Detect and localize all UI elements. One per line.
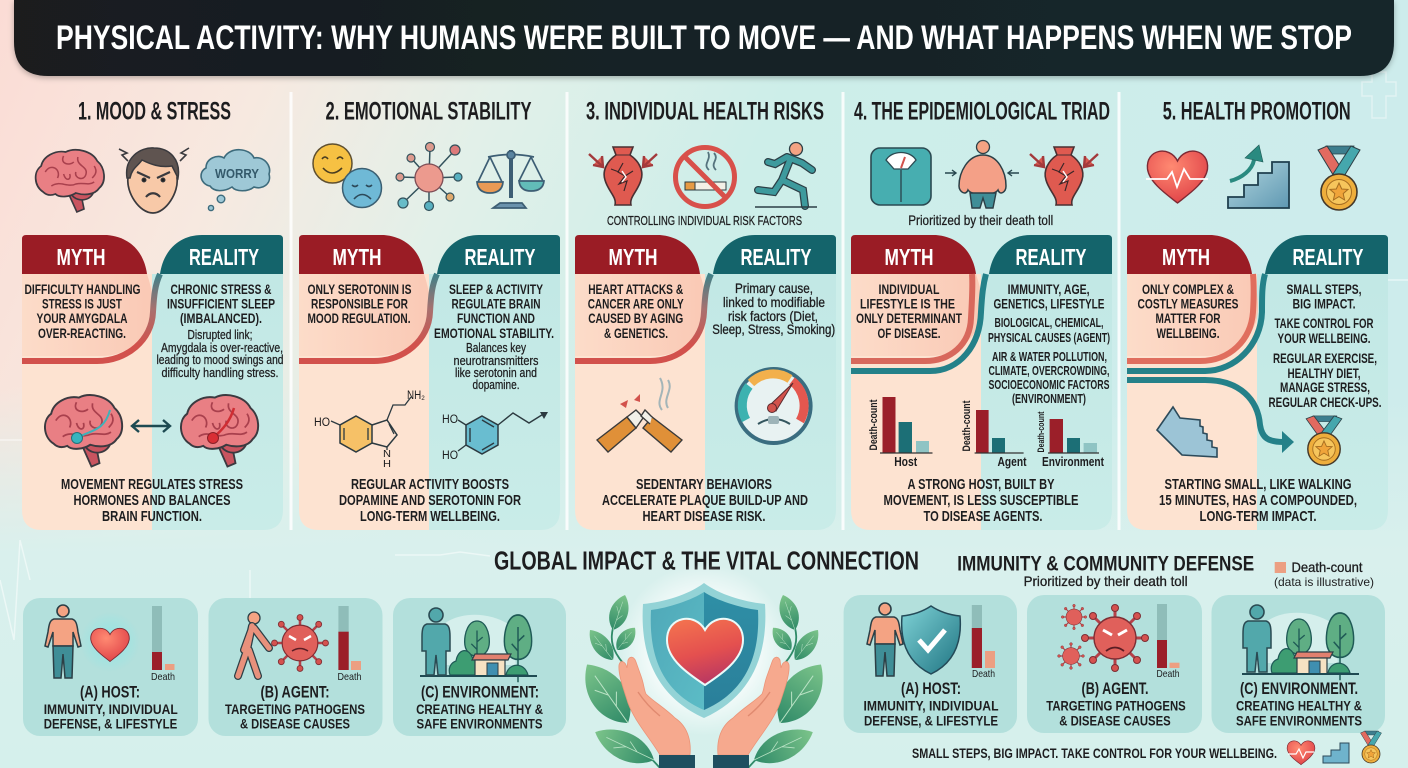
icon: medal reward: [1306, 416, 1342, 465]
reality text: [988, 281, 1110, 406]
takeaway text: [339, 476, 521, 525]
reality text: CLIMATE, OVERCROWDING,: [988, 364, 1110, 378]
card text: DEFENSE, & LIFESTYLE: [864, 713, 998, 729]
card text: DEFENSE, & LIFESTYLE: [44, 716, 177, 732]
icon: running figure: [755, 142, 817, 207]
takeaway text: [884, 476, 1078, 525]
title bar: [14, 0, 1394, 76]
icon: balance scale: [477, 150, 544, 208]
bar chart: agent: Agent: [998, 455, 1027, 469]
takeaway text: [1159, 476, 1357, 525]
heading 1: 1. MOOD & STRESS: [78, 98, 231, 126]
icon: walking person: [238, 612, 269, 676]
reality label: REALITY: [1016, 244, 1086, 270]
myth text: ONLY COMPLEX &: [1142, 281, 1234, 297]
card text: & DISEASE CAUSES: [1059, 713, 1171, 729]
myth text: CANCER ARE ONLY: [588, 296, 684, 312]
icon: person and neighbourhood: [420, 608, 537, 682]
heading: global impact: GLOBAL IMPACT & THE VITAL CONNECTION: [494, 546, 919, 576]
takeaway text: LONG-TERM IMPACT.: [1200, 508, 1316, 525]
reality text: PHYSICAL CAUSES (AGENT): [988, 331, 1110, 345]
card text: [1046, 680, 1186, 729]
myth text: [856, 281, 962, 341]
death bar: Death: [972, 668, 995, 680]
reality text: (IMBALANCED).: [180, 310, 262, 326]
myth label: MYTH: [1162, 244, 1210, 270]
myth text: MOOD REGULATION.: [308, 310, 410, 326]
heading 3: 3. INDIVIDUAL HEALTH RISKS: [586, 98, 824, 126]
icon: person: [867, 603, 903, 676]
reality text: like serotonin and: [455, 366, 537, 380]
card: left environment: [393, 598, 566, 736]
card text: (C) ENVIRONMENT:: [421, 684, 539, 702]
icon: serotonin molecule: NH₂: [407, 390, 425, 402]
reality text: CHRONIC STRESS &: [170, 281, 272, 297]
card text: CREATING HEALTHY &: [416, 701, 543, 717]
reality label: REALITY: [740, 244, 812, 270]
myth text: WELLBEING.: [1156, 325, 1220, 341]
reality text: INSUFFICIENT SLEEP: [167, 296, 275, 312]
reality text: AIR & WATER POLLUTION,: [992, 350, 1107, 364]
column dividers: [291, 92, 1119, 530]
icon: serotonin molecule: H: [383, 458, 391, 470]
reality text: Sleep, Stress, Smoking): [712, 321, 835, 337]
reality label: REALITY: [189, 244, 259, 270]
left hand and leaves: [572, 592, 695, 768]
reality text: SMALL STEPS,: [1286, 281, 1362, 297]
death bar: Death: [1156, 668, 1180, 680]
icon: heart with glow: [80, 612, 140, 672]
icon: walking shoe: [1157, 407, 1217, 457]
reality text: [156, 281, 284, 380]
reality text: dopamine.: [472, 378, 520, 392]
takeaway text: ACCELERATE PLAQUE BUILD-UP AND: [602, 492, 808, 509]
heading 2: 2. EMOTIONAL STABILITY: [326, 98, 532, 126]
panel 4: the epidemiological triad: [851, 98, 1112, 530]
takeaway text: MOVEMENT, IS LESS SUSCEPTIBLE: [884, 492, 1078, 509]
myth and reality card: [575, 235, 836, 530]
myth text: & GENETICS.: [604, 325, 668, 341]
myth label: MYTH: [332, 244, 382, 270]
takeaway text: [61, 476, 243, 525]
card: left host: [23, 598, 198, 736]
reality text: Disrupted link;: [188, 328, 252, 342]
closing strap line: SMALL STEPS, BIG IMPACT. TAKE CONTROL FOR YOUR WELLBEING.: [912, 745, 1277, 761]
card text: IMMUNITY, INDIVIDUAL: [864, 698, 999, 714]
myth text: DIFFICULTY HANDLING: [24, 281, 141, 297]
card text: [225, 684, 365, 732]
icon: dopamine molecule: [442, 412, 548, 462]
death bar: Death: [151, 671, 175, 683]
takeaway text: STARTING SMALL, LIKE WALKING: [1164, 476, 1352, 493]
controlling risk factors caption: CONTROLLING INDIVIDUAL RISK FACTORS: [607, 214, 802, 228]
icon: weighing scale: [871, 148, 931, 205]
reality text: [1268, 281, 1382, 410]
reality text: neurotransmitters: [454, 354, 538, 368]
panel 2: emotional stability: [299, 98, 560, 530]
icon: cracked heart vase with arrows: [589, 147, 657, 205]
bar chart: environment: Death-count: [1036, 412, 1046, 452]
icon: brain: [36, 150, 104, 212]
icon: no smoking sign: [676, 148, 734, 206]
myth text: [24, 281, 141, 341]
myth text: ONLY DETERMINANT: [856, 310, 962, 326]
myth text: STRESS IS JUST: [42, 296, 122, 312]
card text: TARGETING PATHOGENS: [225, 701, 365, 717]
icon: shield with check: [902, 606, 960, 674]
icon: worry thought cloud: WORRY: [215, 166, 259, 181]
bar chart: agent: Death-count: [961, 400, 973, 452]
card: right host: [844, 595, 1017, 733]
reality text: REGULATE BRAIN: [452, 296, 540, 312]
card: left agent: [208, 598, 382, 736]
myth label: MYTH: [56, 244, 106, 270]
card text: (C) ENVIRONMENT.: [1240, 680, 1358, 698]
takeaway text: DOPAMINE AND SEROTONIN FOR: [339, 492, 521, 509]
card text: [44, 684, 178, 732]
takeaway text: LONG-TERM WELLBEING.: [360, 508, 500, 525]
reality text: BIG IMPACT.: [1292, 296, 1356, 312]
myth text: [588, 281, 684, 341]
icon: person and neighbourhood: [1242, 605, 1359, 680]
icon: risk gauge: [737, 369, 811, 443]
reality text: risk factors (Diet,: [728, 308, 818, 324]
myth label: MYTH: [608, 244, 658, 270]
icon: happy and sad faces: [313, 144, 382, 208]
card text: CREATING HEALTHY &: [1236, 698, 1362, 714]
reality text: EMOTIONAL STABILITY.: [434, 325, 554, 341]
takeaway text: MOVEMENT REGULATES STRESS: [61, 476, 243, 493]
reality text: [712, 280, 835, 337]
icon: serotonin molecule: [314, 390, 425, 470]
death bar: Death: [338, 671, 362, 683]
myth text: OF DISEASE.: [878, 325, 940, 341]
legend: death count: [1274, 559, 1374, 589]
reality text: BIOLOGICAL, CHEMICAL,: [994, 316, 1104, 330]
reality text: difficulty handling stress.: [162, 366, 278, 380]
subheading: death toll: Prioritized by their death toll: [1024, 573, 1188, 589]
icon: worry thought cloud: [201, 150, 270, 211]
myth label: MYTH: [884, 244, 934, 270]
myth text: OVER-REACTING.: [38, 325, 126, 341]
icon: angry face: [119, 148, 189, 213]
reality text: GENETICS, LIFESTYLE: [994, 296, 1104, 312]
myth text: HEART ATTACKS &: [588, 281, 683, 297]
reality text: Primary cause,: [735, 280, 813, 296]
takeaway text: [602, 476, 808, 525]
icon: pathogens: [1058, 604, 1148, 672]
myth text: LIFESTYLE IS THE: [860, 296, 955, 312]
card text: (A) HOST:: [901, 680, 961, 698]
takeaway text: SEDENTARY BEHAVIORS: [636, 476, 772, 493]
takeaway text: HEART DISEASE RISK.: [642, 508, 766, 525]
reality text: FUNCTION AND: [457, 310, 535, 326]
icon: dopamine molecule: HO: [442, 450, 458, 462]
myth text: INDIVIDUAL: [878, 281, 940, 297]
bar chart: environment: Environment: [1042, 455, 1105, 469]
icon: mini stairs: [1323, 743, 1349, 763]
death bar: [972, 605, 995, 680]
icon: overweight person with arrows: [945, 140, 1019, 208]
icon: serotonin molecule: N: [383, 448, 391, 460]
card text: SAFE ENVIRONMENTS: [416, 716, 542, 732]
icon: mini medal: [1360, 731, 1382, 763]
icon: heart with pulse: [1146, 151, 1208, 203]
card text: [864, 680, 999, 729]
card text: IMMUNITY, INDIVIDUAL: [44, 701, 178, 717]
icon: double arrow: [132, 420, 170, 432]
myth and reality card: [851, 235, 1112, 530]
icon: stressed brain: [181, 395, 258, 467]
bar chart: host: [868, 397, 932, 469]
icon: dopamine molecule: HO: [442, 414, 458, 426]
reality text: Amygdala is over-reactive,: [161, 341, 283, 355]
icon: cracked vase with arrows: [1030, 147, 1098, 205]
heart: [667, 619, 743, 685]
takeaway text: HORMONES AND BALANCES: [74, 492, 230, 509]
takeaway text: REGULAR ACTIVITY BOOSTS: [351, 476, 509, 493]
icon: mini heart: [1287, 741, 1315, 765]
icon: stairs with rising arrow: [1228, 145, 1289, 208]
takeaway text: BRAIN FUNCTION.: [102, 508, 202, 525]
reality text: leading to mood swings and: [156, 353, 284, 367]
reality text: linked to modifiable: [723, 294, 825, 310]
card text: (B) AGENT:: [260, 684, 330, 702]
icon: calm brain: [45, 395, 122, 467]
glow behind shield: [618, 564, 790, 736]
panel 1: mood and stress: [22, 98, 284, 530]
icon: broken cigarette: [597, 378, 682, 452]
right hand and leaves: [713, 592, 836, 768]
icon: neurotransmitter network: [396, 142, 462, 210]
death toll caption: Prioritized by their death toll: [908, 212, 1053, 228]
heading: immunity and community defense: IMMUNITY & COMMUNITY DEFENSE: [957, 552, 1254, 576]
icon: person: [45, 605, 81, 678]
heading 4: 4. THE EPIDEMIOLOGICAL TRIAD: [854, 98, 1110, 126]
reality text: IMMUNITY, AGE,: [1008, 281, 1090, 297]
card text: [1236, 680, 1362, 729]
reality text: SOCIOECONOMIC FACTORS: [988, 378, 1110, 392]
reality text: HEALTHY DIET,: [1288, 365, 1360, 381]
icon: virus: [272, 615, 328, 671]
myth and reality card: [22, 235, 284, 530]
legend: death count: Death-count: [1292, 559, 1363, 575]
death bar: [151, 606, 175, 683]
bar chart: host: Death-count: [868, 399, 880, 450]
reality text: Balances key: [466, 341, 527, 355]
reality text: MANAGE STRESS,: [1280, 379, 1370, 395]
card text: (B) AGENT.: [1082, 680, 1148, 698]
reality label: REALITY: [1292, 244, 1364, 270]
card: right agent: [1027, 595, 1202, 733]
myth text: COSTLY MEASURES: [1138, 296, 1238, 312]
myth text: CAUSED BY AGING: [588, 310, 683, 326]
reality label: REALITY: [464, 244, 536, 270]
myth text: YOUR AMYGDALA: [36, 310, 128, 326]
bar chart: environment: [1036, 412, 1105, 469]
card text: (A) HOST:: [80, 684, 140, 702]
myth text: MATTER FOR: [1156, 310, 1220, 326]
myth text: [1138, 281, 1238, 341]
myth and reality card: [1127, 235, 1388, 530]
central illustration: shield, heart and hands: [572, 564, 836, 768]
reality text: [434, 281, 554, 392]
legend: death count: (data is illustrative): [1274, 575, 1374, 589]
card text: TARGETING PATHOGENS: [1046, 698, 1186, 714]
death bar: [1156, 604, 1180, 680]
panel 5: health promotion: [1127, 98, 1388, 530]
reality text: (ENVIRONMENT): [1012, 392, 1086, 406]
shield: [643, 583, 765, 718]
myth text: [308, 281, 412, 326]
arrow to medal: [1127, 380, 1294, 453]
panel 3: individual health risks: [575, 98, 836, 530]
myth and reality card: [299, 235, 560, 530]
death bar: [338, 606, 362, 683]
bar chart: host: Host: [894, 455, 918, 469]
reality text: YOUR WELLBEING.: [1278, 330, 1370, 346]
myth text: RESPONSIBLE FOR: [311, 296, 408, 312]
takeaway text: TO DISEASE AGENTS.: [924, 508, 1042, 525]
card text: [416, 684, 543, 732]
icon: medal: [1318, 146, 1360, 210]
myth text: ONLY SEROTONIN IS: [308, 281, 412, 297]
bar chart: agent: [961, 400, 1027, 469]
reality text: SLEEP & ACTIVITY: [449, 281, 543, 297]
card text: & DISEASE CAUSES: [240, 716, 350, 732]
card text: SAFE ENVIRONMENTS: [1236, 713, 1362, 729]
takeaway text: A STRONG HOST, BUILT BY: [908, 476, 1054, 493]
icon: serotonin molecule: HO: [314, 417, 330, 429]
card: right environment: [1212, 595, 1385, 733]
